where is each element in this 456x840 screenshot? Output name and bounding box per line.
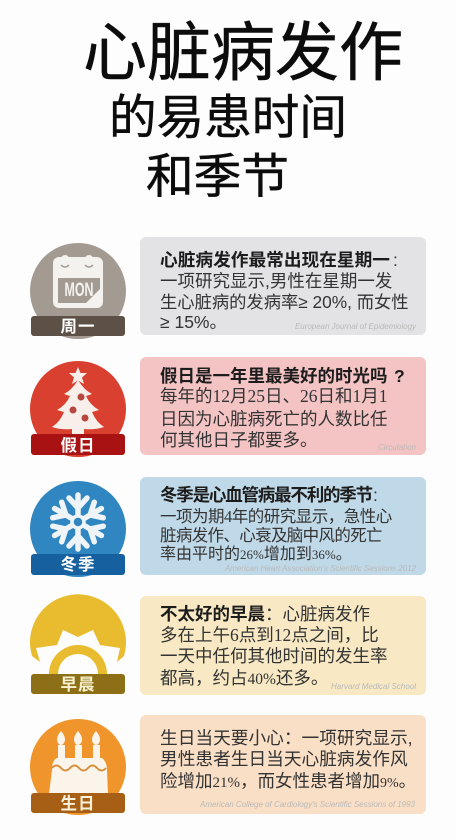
label: winter: 冬季 (60, 555, 96, 574)
text card: winter: 率由平时的26%增加到36%。 (160, 545, 352, 563)
text card: Monday (140, 237, 426, 335)
icon: calendar MON: MON (64, 280, 94, 301)
title: 心脏病发作 (83, 17, 403, 89)
text card: birthday: 男性患者生日当天心脏病发作风 (160, 749, 408, 769)
text card: morning: 一天中任何其他时间的发生率 (160, 646, 388, 666)
text card: Monday: 心脏病发作最常出现在星期一 (160, 249, 390, 270)
text card: winter: : (373, 485, 378, 505)
text card: Monday: ≥ 15%。 (160, 312, 227, 332)
label: birthday (31, 793, 125, 813)
text card: Monday: 生心脏病的发病率≥ 20%, 而女性 (160, 292, 409, 312)
text card: morning: 都高，约占40%还多。 (160, 668, 328, 688)
panel: morning (30, 594, 426, 695)
text card: winter: American Heart Association's Scientific Sessions 2012 (224, 564, 417, 573)
text card: winter (140, 477, 426, 575)
label: holiday: 假日 (60, 436, 96, 455)
text card: birthday: American College of Cardiology's Scientific Sessions of 1993 (199, 800, 416, 809)
text card: birthday (140, 715, 426, 814)
text card: Monday: 一项研究显示,男性在星期一发 (160, 271, 392, 291)
text card: winter: 脏病发作、心衰及脑中风的死亡 (160, 526, 382, 545)
icon: birthday cake (30, 719, 126, 815)
icon: calendar MON (30, 243, 126, 339)
text card: holiday: ? (394, 366, 405, 386)
panel: holiday (30, 357, 426, 457)
icon: christmas tree (30, 361, 126, 457)
icon: rising sun (30, 594, 126, 674)
label: morning (31, 674, 125, 694)
text card: birthday: 生日当天要小心：一项研究显示, (160, 728, 413, 748)
label: birthday: 生日 (60, 794, 96, 813)
label: Monday (31, 316, 125, 336)
icon: snowflake (30, 481, 126, 577)
text card: morning: 不太好的早晨：心脏病发作 (160, 604, 370, 624)
panel: birthday (30, 715, 426, 815)
label: holiday (31, 434, 125, 455)
text card: holiday: 假日是一年里最美好的时光吗 (160, 366, 388, 386)
text card: morning: 多在上午6点到12点之间，比 (160, 625, 379, 645)
text card: holiday (140, 357, 426, 455)
text card: morning: Harvard Medical School (331, 682, 416, 691)
panel: Monday (30, 237, 426, 339)
text card: winter: 冬季是心血管病最不利的季节 (160, 485, 373, 505)
panel: winter (30, 477, 426, 577)
text card: holiday: 何其他日子都要多。 (160, 430, 318, 450)
text card: Monday: : (393, 250, 398, 270)
text card: birthday: 险增加21%，而女性患者增加9%。 (160, 771, 416, 791)
title: 和季节 (146, 151, 289, 204)
label: morning: 早晨 (60, 675, 96, 694)
text card: morning (140, 596, 426, 695)
label: Monday: 周一 (60, 318, 96, 336)
text card: Monday: European Journal of Epidemiology (295, 322, 417, 331)
text card: winter: 一项为期4年的研究显示，急性心 (160, 507, 392, 526)
text card: holiday: Circulation (378, 443, 417, 452)
label: winter (31, 554, 125, 575)
title: 的易患时间 (109, 92, 347, 145)
title (83, 17, 403, 204)
text card: holiday: 每年的12月25日、26日和1月1 (160, 386, 388, 406)
text card: holiday: 日因为心脏病死亡的人数比任 (160, 409, 388, 429)
